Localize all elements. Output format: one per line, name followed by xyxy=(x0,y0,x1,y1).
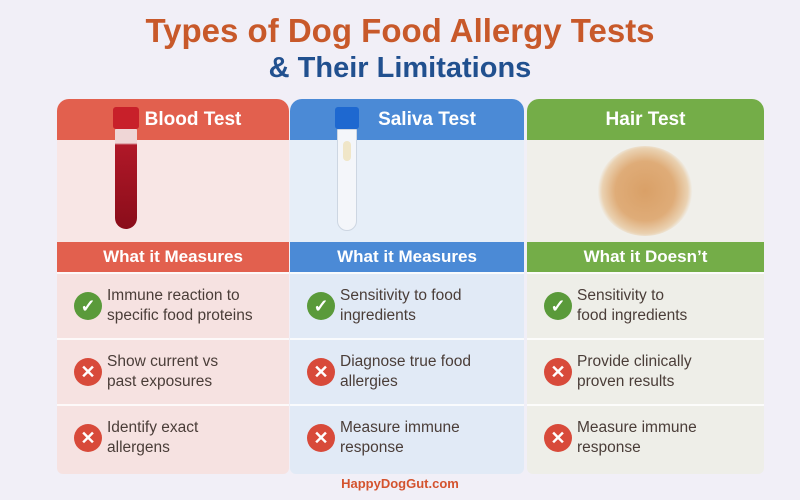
icon: blood tube xyxy=(113,107,139,229)
header: hair test xyxy=(527,99,764,140)
row 1: ✓ xyxy=(313,296,329,316)
row 3: Measure immune xyxy=(577,419,697,436)
image: hair tuft xyxy=(527,140,764,242)
image area xyxy=(290,140,524,242)
subtitle: & Their Limitations xyxy=(269,52,531,84)
row 3: response xyxy=(340,439,404,456)
row 2 xyxy=(527,338,764,404)
row 2: Show current vs xyxy=(107,353,218,370)
row 1: specific food proteins xyxy=(107,307,253,324)
row 3 xyxy=(290,404,524,470)
row 1 xyxy=(290,272,524,338)
subheader: What it Doesn’t xyxy=(584,247,707,266)
header: hair test: Hair Test xyxy=(606,109,685,130)
row 2 xyxy=(57,338,289,404)
row 3: ✕ xyxy=(80,428,96,448)
row 1 xyxy=(57,272,289,338)
row 1 xyxy=(527,272,764,338)
subheader xyxy=(290,242,524,272)
row 1: food ingredients xyxy=(577,307,687,324)
row 3: ✕ xyxy=(550,428,566,448)
panel: hair test xyxy=(527,99,764,474)
row 1: ingredients xyxy=(340,307,416,324)
panel: blood test xyxy=(57,99,289,474)
row 3: ✕ xyxy=(313,428,329,448)
row 2: ✕ xyxy=(313,362,329,382)
row 3: allergens xyxy=(107,439,170,456)
row 3: response xyxy=(577,439,641,456)
row 1: Sensitivity to food xyxy=(340,287,461,304)
panel: saliva test xyxy=(290,99,524,474)
row 2: past exposures xyxy=(107,373,212,390)
row 1: ✓ xyxy=(550,296,566,316)
row 2: ✕ xyxy=(80,362,96,382)
row 2 xyxy=(290,338,524,404)
row 1: Immune reaction to xyxy=(107,287,240,304)
footer: site name: HappyDogGut.com xyxy=(341,476,459,491)
row 2: allergies xyxy=(340,373,398,390)
subheader xyxy=(57,242,289,272)
subheader: What it Measures xyxy=(337,247,477,266)
row 2: Diagnose true food xyxy=(340,353,471,370)
header: saliva test xyxy=(290,99,524,140)
row 3: Identify exact xyxy=(107,419,198,436)
image area xyxy=(57,140,289,242)
header: blood test xyxy=(57,99,289,140)
row 2: ✕ xyxy=(550,362,566,382)
row 2: Provide clinically xyxy=(577,353,692,370)
subheader: What it Measures xyxy=(103,247,243,266)
title: Types of Dog Food Allergy Tests xyxy=(145,12,655,49)
row 1: Sensitivity to xyxy=(577,287,664,304)
header: blood test: Blood Test xyxy=(145,109,241,130)
row 3 xyxy=(527,404,764,470)
subheader xyxy=(527,242,764,272)
icon: swab tube xyxy=(335,107,359,231)
row 1: ✓ xyxy=(80,296,96,316)
row 2: proven results xyxy=(577,373,674,390)
row 3 xyxy=(57,404,289,470)
header: saliva test: Saliva Test xyxy=(378,109,476,130)
row 3: Measure immune xyxy=(340,419,460,436)
